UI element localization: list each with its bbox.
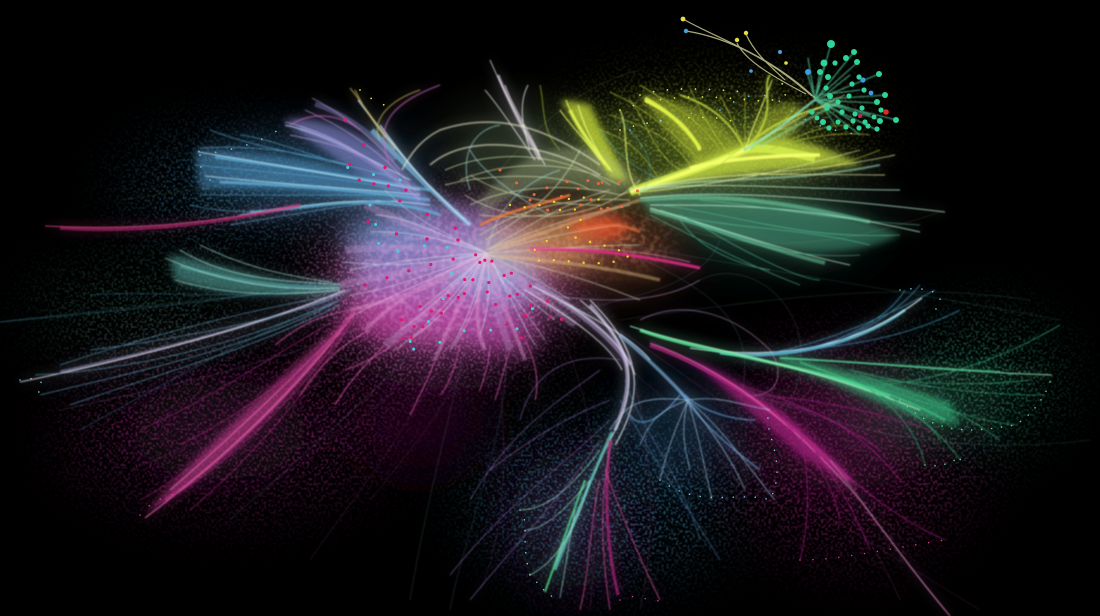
speckle: faint outer nodes	[30, 90, 1060, 580]
lower blue fan	[610, 335, 775, 500]
yellow-green upper bundle	[540, 75, 895, 195]
cluster edges	[745, 44, 897, 150]
orange core	[480, 190, 700, 300]
lower-left bundles	[0, 245, 355, 518]
left blue bundles	[190, 85, 470, 225]
outer glow haze	[130, 114, 1010, 590]
cluster nodes	[809, 40, 899, 132]
nodes: hub magenta, cyan, orange and yellow dots along dashed paths	[20, 80, 1052, 601]
hub texture	[350, 214, 670, 335]
pale green right bundle	[630, 186, 945, 285]
lower teal and magenta stems	[450, 300, 720, 610]
cluster accent nodes	[805, 69, 889, 118]
top white-pink feather	[402, 60, 640, 245]
right green fan	[630, 325, 1060, 465]
central hub fill	[342, 210, 538, 350]
bundle wedge fills	[145, 95, 900, 515]
right blue teal streak	[690, 285, 960, 355]
central hub rays	[275, 190, 575, 415]
top-right thin strands with end nodes	[681, 17, 815, 98]
left magenta streak	[45, 205, 300, 229]
green cluster	[745, 40, 899, 150]
right magenta fan	[650, 343, 950, 616]
center-right bundles	[520, 280, 778, 396]
